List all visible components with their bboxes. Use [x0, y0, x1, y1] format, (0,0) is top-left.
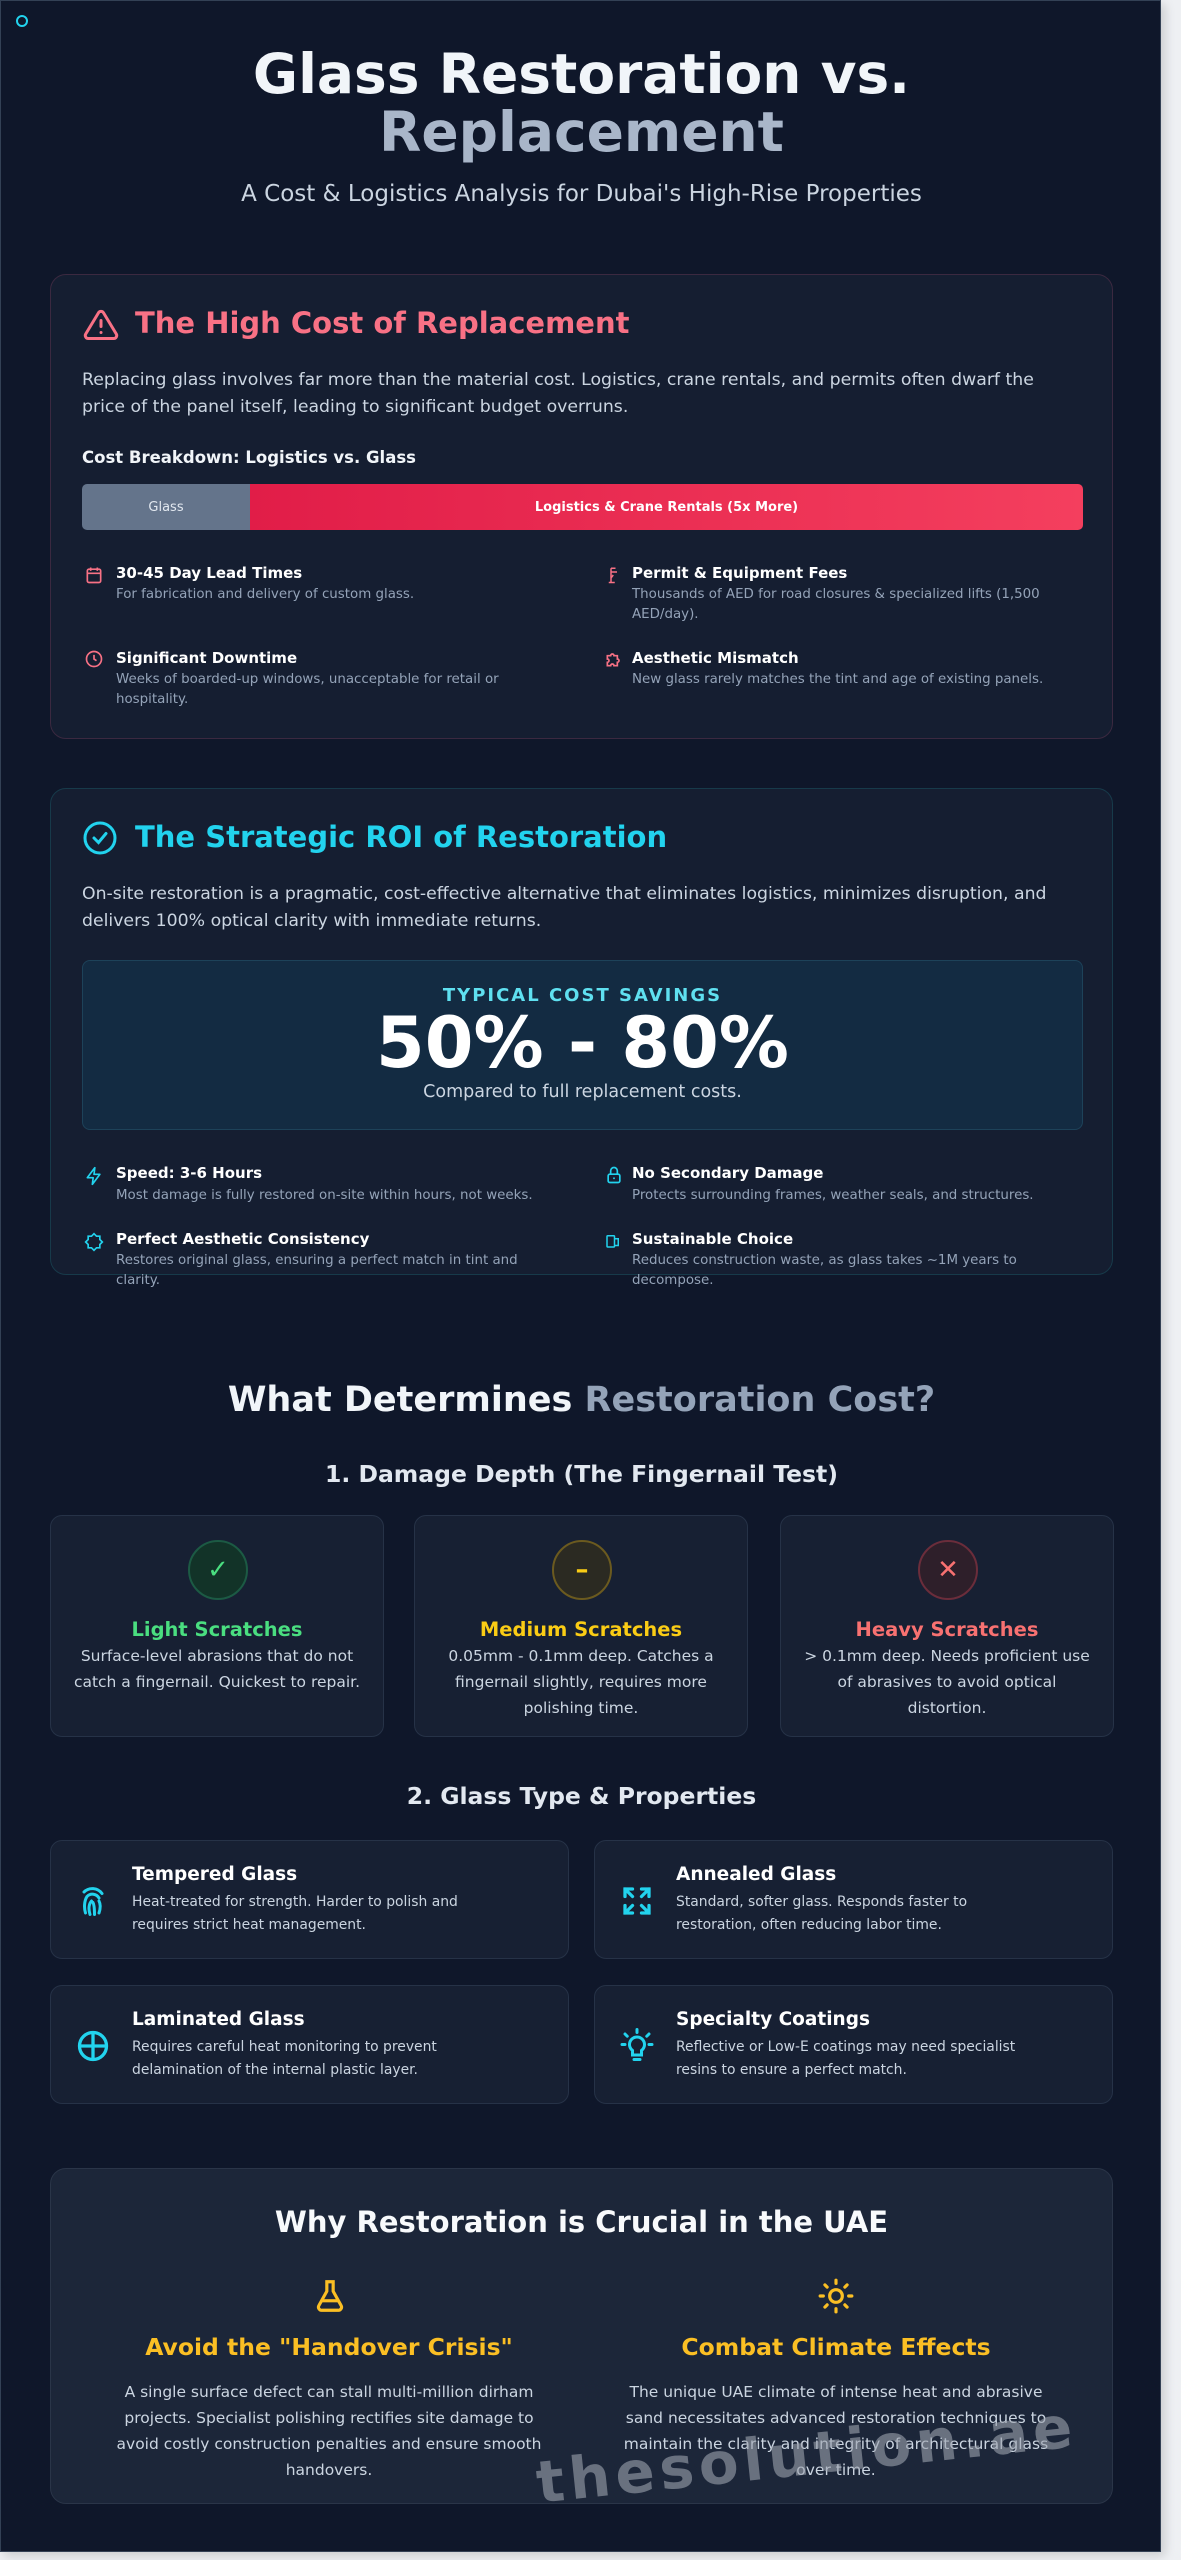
card: annealed glass — [594, 1840, 1113, 1959]
card: laminated glass: Laminated Glass — [132, 2009, 305, 2030]
title — [253, 42, 910, 164]
column: climate effects: sand necessitates advanced restoration techniques to — [626, 2409, 1046, 2427]
text block — [82, 370, 1034, 417]
feature: permit fees: AED/day). — [632, 607, 699, 622]
text block: delivers 100% optical clarity with immediate returns. — [82, 911, 541, 931]
heading: The High Cost of Replacement — [135, 306, 630, 340]
card: annealed glass: restoration, often reducing labor time. — [676, 1917, 942, 1933]
column: climate effects: over time. — [796, 2461, 876, 2479]
card: laminated glass: delamination of the internal plastic layer. — [132, 2062, 418, 2078]
column: climate effects — [624, 2278, 1048, 2479]
column: climate effects: The unique UAE climate of intense heat and abrasive — [630, 2383, 1042, 2401]
feature: lead times: For fabrication and delivery of custom glass. — [116, 587, 414, 602]
card: specialty coatings — [594, 1985, 1113, 2104]
card: specialty coatings: Specialty Coatings — [676, 2009, 870, 2030]
icon: badge — [84, 1232, 104, 1252]
column: handover crisis: avoid costly construction penalties and ensure smooth — [117, 2435, 541, 2453]
feature: speed — [86, 1164, 533, 1203]
heading: The Strategic ROI of Restoration — [135, 820, 667, 854]
feature: downtime — [86, 649, 499, 707]
icon: check: ✓ — [207, 1555, 229, 1585]
icon: sun — [818, 2278, 854, 2314]
icon: puzzle — [606, 653, 620, 666]
card: heavy scratches: > 0.1mm deep. Needs proficient use — [804, 1647, 1090, 1665]
card: medium scratches: fingernail slightly, requires more — [455, 1673, 707, 1691]
chart label: Cost Breakdown: Logistics vs. Glass — [82, 448, 416, 467]
card: heavy scratches: Heavy Scratches — [856, 1618, 1038, 1641]
icon: small cyan ring — [16, 15, 28, 27]
callout: cost savings: 50% - 80% — [376, 1002, 789, 1084]
column: handover crisis: Avoid the "Handover Crisis" — [145, 2333, 513, 2361]
feature: lead times: 30-45 Day Lead Times — [116, 564, 302, 582]
column: handover crisis — [117, 2280, 541, 2479]
heading: what determines cost: What Determines Restoration Cost? — [228, 1380, 935, 1420]
bar chart: Logistics & Crane Rentals (5x More) — [535, 500, 798, 514]
feature: sustainable: Reduces construction waste, as glass takes ~1M years to — [632, 1253, 1017, 1268]
subheading: damage depth: 1. Damage Depth (The Fingernail Test) — [325, 1460, 838, 1488]
card: light scratches: catch a fingernail. Quickest to repair. — [74, 1673, 360, 1691]
icon: lightning — [86, 1166, 101, 1186]
card: medium scratches: 0.05mm - 0.1mm deep. Catches a — [448, 1647, 714, 1665]
bar chart — [82, 484, 1083, 530]
column: climate effects: Combat Climate Effects — [681, 2333, 991, 2361]
watermark: thesolution.ae — [533, 2392, 1080, 2517]
feature: lead times — [86, 564, 414, 602]
card: heavy scratches: of abrasives to avoid optical — [838, 1673, 1056, 1691]
card: tempered glass: Tempered Glass — [132, 1864, 297, 1885]
text block — [82, 884, 1047, 931]
panel: high cost of replacement — [50, 274, 1113, 739]
card: light scratches: Surface-level abrasions that do not — [81, 1647, 353, 1665]
card: tempered glass: Heat-treated for strength. Harder to polish and — [132, 1894, 458, 1910]
column: climate effects: maintain the clarity and integrity of architectural glass — [624, 2435, 1048, 2453]
card: annealed glass: Standard, softer glass. Responds faster to — [676, 1894, 967, 1910]
icon: cross — [918, 1540, 978, 1600]
card: annealed glass: Annealed Glass — [676, 1864, 836, 1885]
card: medium scratches: polishing time. — [524, 1699, 638, 1717]
feature: aesthetic consistency — [84, 1230, 518, 1288]
feature: downtime: Significant Downtime — [116, 649, 297, 667]
feature: permit fees: Thousands of AED for road closures & specialized lifts (1,500 — [632, 587, 1040, 602]
icon: clock — [86, 650, 102, 668]
icon: check circle — [84, 822, 116, 854]
icon: flask — [316, 2280, 344, 2312]
feature: no secondary damage: No Secondary Damage — [632, 1164, 823, 1182]
text block: Replacing glass involves far more than the material cost. Logistics, crane rentals, and permits often dwarf the — [82, 370, 1034, 390]
card: heavy scratches: distortion. — [908, 1699, 986, 1717]
card: light scratches: Light Scratches — [131, 1618, 303, 1641]
feature: downtime: hospitality. — [116, 692, 188, 707]
subheading: glass type: 2. Glass Type & Properties — [407, 1782, 756, 1810]
icon: cross: ✕ — [937, 1555, 959, 1585]
icon: warning triangle — [84, 310, 118, 340]
card: tempered glass — [50, 1840, 569, 1959]
icon: lock — [607, 1166, 621, 1184]
card: medium scratches: Medium Scratches — [480, 1618, 682, 1641]
callout: cost savings — [82, 960, 1083, 1130]
feature: speed: Speed: 3-6 Hours — [116, 1164, 262, 1182]
bar chart: Glass — [148, 500, 184, 514]
title: Glass Restoration vs. — [253, 42, 910, 106]
feature: aesthetic consistency: Perfect Aesthetic Consistency — [116, 1230, 369, 1248]
text block: price of the panel itself, leading to significant budget overruns. — [82, 397, 628, 417]
card: laminated glass — [50, 1985, 569, 2104]
card: laminated glass: Requires careful heat monitoring to prevent — [132, 2039, 437, 2055]
icon: check — [188, 1540, 248, 1600]
text: decompose. — [632, 1273, 714, 1288]
icon: minus: – — [576, 1555, 588, 1585]
card: specialty coatings: Reflective or Low-E coatings may need specialist — [676, 2039, 1015, 2055]
card: heavy scratches — [780, 1515, 1114, 1737]
icon: recycle box — [606, 1235, 619, 1248]
card: light scratches — [50, 1515, 384, 1737]
callout: cost savings: TYPICAL COST SAVINGS — [443, 985, 722, 1006]
icon: expand arrows — [623, 1887, 651, 1915]
feature: no secondary damage: Protects surrounding frames, weather seals, and structures. — [632, 1188, 1034, 1203]
column: handover crisis: handovers. — [286, 2461, 372, 2479]
feature: sustainable — [606, 1230, 1017, 1288]
card: specialty coatings: resins to ensure a perfect match. — [676, 2062, 907, 2078]
column: handover crisis: projects. Specialist polishing rectifies site damage to — [124, 2409, 534, 2427]
panel: strategic ROI — [50, 788, 1113, 1275]
title: Replacement — [379, 100, 784, 164]
text: clarity. — [116, 1273, 160, 1288]
callout: cost savings: Compared to full replacement costs. — [423, 1082, 742, 1102]
icon: crane — [608, 568, 617, 584]
feature: no secondary damage — [607, 1164, 1034, 1203]
heading: Why Restoration is Crucial in the UAE — [275, 2205, 888, 2239]
feature: mismatch: New glass rarely matches the tint and age of existing panels. — [632, 672, 1043, 687]
feature: permit fees — [608, 564, 1040, 622]
feature: speed: Most damage is fully restored on-site within hours, not weeks. — [116, 1188, 533, 1203]
card: tempered glass: requires strict heat management. — [132, 1917, 366, 1933]
icon: circle cross — [78, 2030, 108, 2062]
panel: why restoration in UAE — [50, 2168, 1113, 2504]
feature: mismatch: Aesthetic Mismatch — [632, 649, 799, 667]
subtitle: A Cost & Logistics Analysis for Dubai's High-Rise Properties — [241, 181, 922, 207]
icon: minus — [552, 1540, 612, 1600]
column: handover crisis: A single surface defect can stall multi-million dirham — [125, 2383, 533, 2401]
feature: aesthetic consistency: Restores original glass, ensuring a perfect match in tint and — [116, 1253, 518, 1268]
icon: calendar — [86, 568, 102, 584]
icon: fingerprint — [82, 1887, 104, 1916]
icon: lightbulb — [620, 2028, 654, 2061]
feature: sustainable: Sustainable Choice — [632, 1230, 793, 1248]
feature: downtime: Weeks of boarded-up windows, unacceptable for retail or — [116, 672, 499, 687]
text block: On-site restoration is a pragmatic, cost-effective alternative that eliminates logistics, minimizes disruption, and — [82, 884, 1047, 904]
card: medium scratches — [414, 1515, 748, 1737]
feature: mismatch — [606, 649, 1043, 687]
feature: permit fees: Permit & Equipment Fees — [632, 564, 847, 582]
